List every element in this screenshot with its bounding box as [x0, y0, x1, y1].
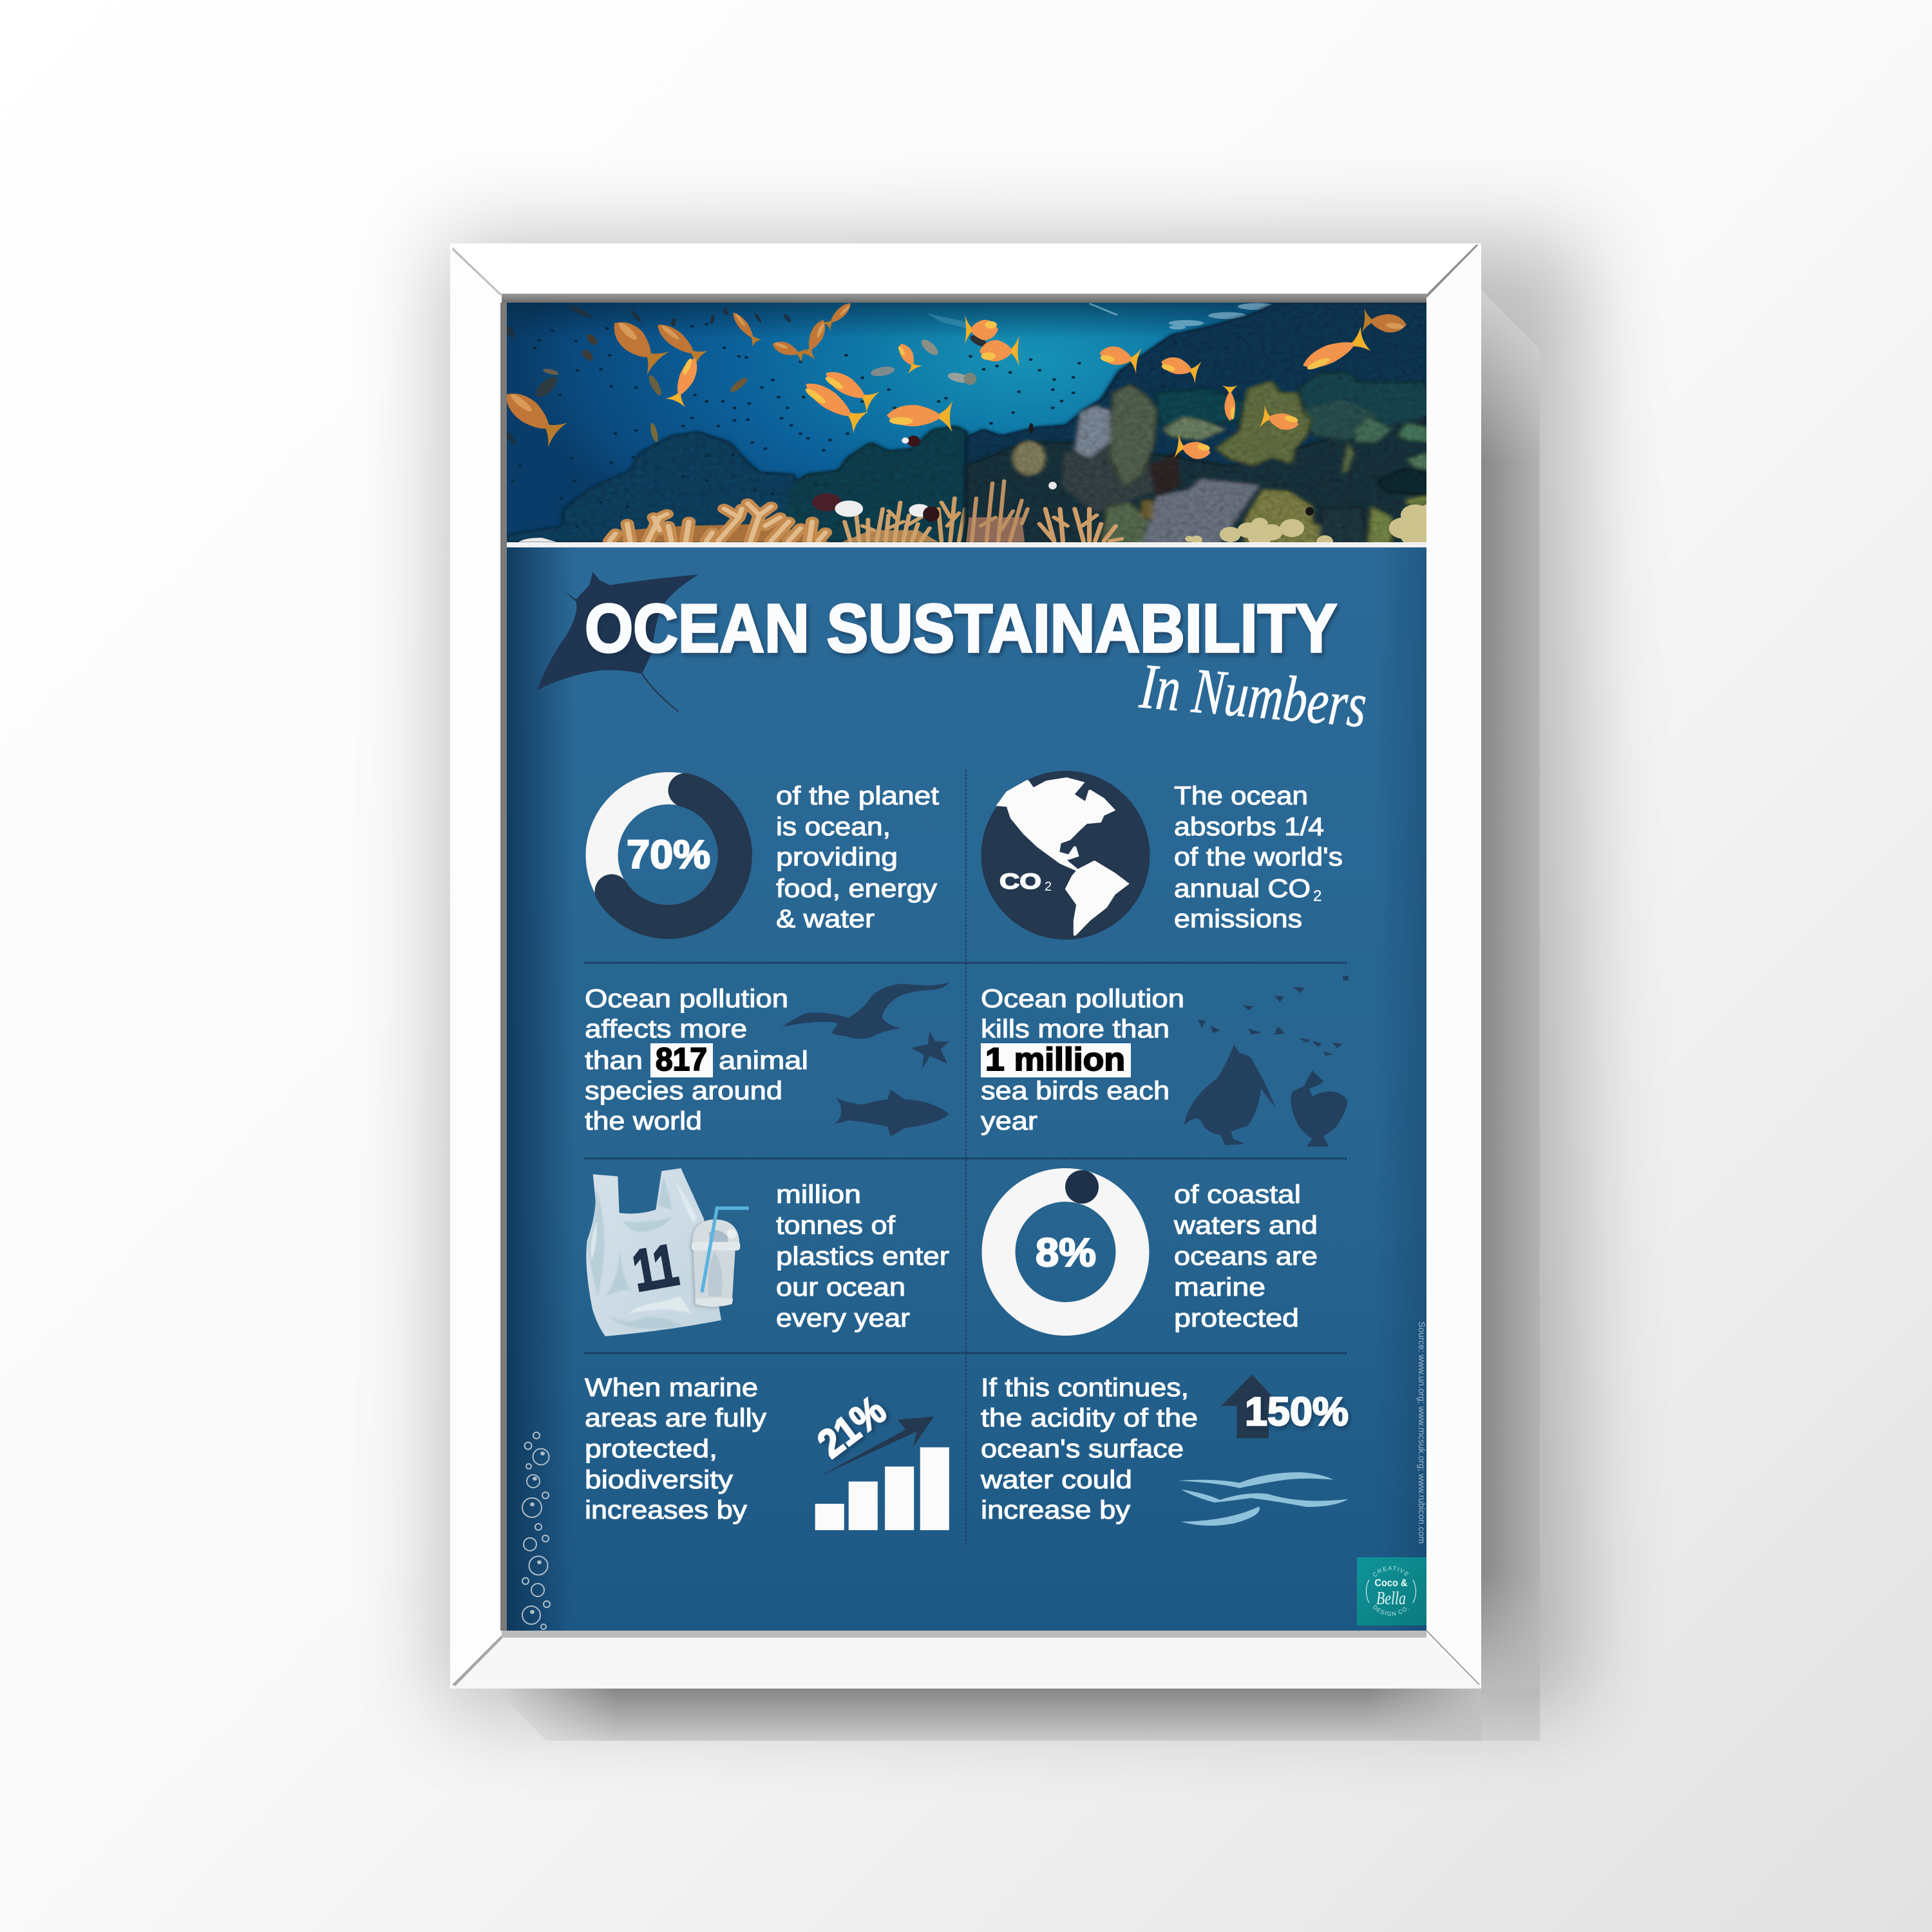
surface light ripples [927, 314, 967, 328]
reef midground [966, 372, 1436, 545]
icon: globe with CO2 [981, 771, 1150, 940]
text: of coastal waters: waters and [1173, 1211, 1318, 1240]
text: ocean pollution affects: affects more [585, 1015, 747, 1043]
text: of the planet: & water [776, 905, 875, 933]
text: ocean pollution kills: Ocean pollution [981, 985, 1184, 1013]
panel: 817 animal species [585, 982, 949, 1137]
bubbles decoration [522, 1432, 550, 1629]
icon: waves [1178, 1472, 1349, 1526]
text: ocean pollution kills [981, 985, 1184, 1135]
right half scenery [963, 303, 1443, 548]
frame soft shadow halo [446, 242, 1579, 1710]
icon: manta ray [537, 572, 699, 712]
text: ocean pollution affects [585, 985, 808, 1135]
icon: plastic bag and cup: 11 [629, 1233, 683, 1304]
chart: 8% donut: 8% [1036, 1231, 1096, 1275]
fire coral large [607, 498, 965, 542]
text: if this continues: ocean's surface [981, 1435, 1184, 1463]
text: ocean absorbs: of the world's [1174, 843, 1343, 871]
text: ocean absorbs: emissions [1174, 905, 1302, 933]
text: of the planet: is ocean, [776, 813, 891, 841]
text: ocean pollution kills: sea birds each [981, 1077, 1170, 1105]
subtitle: In Numbers: In Numbers [1137, 650, 1369, 741]
plankton specks right [971, 356, 1079, 423]
text: if this continues: increase by [981, 1496, 1130, 1524]
chart: 8% donut [998, 1170, 1132, 1319]
dark small fish [503, 304, 972, 445]
grid divider lines [585, 770, 1347, 1546]
text: ocean absorbs: annual CO [1174, 875, 1311, 903]
left half scenery [503, 304, 972, 542]
text: ocean absorbs [1174, 782, 1343, 933]
text: if this continues [980, 1374, 1198, 1524]
chart: 70% donut: 70% [627, 833, 710, 877]
left reef mounds [507, 426, 967, 542]
text: ocean pollution affects: animal [719, 1046, 808, 1075]
text: if this continues: If this continues, [981, 1374, 1189, 1402]
text: million tonnes: our ocean [776, 1273, 905, 1302]
icon: pelicans and flock [1184, 976, 1349, 1146]
text: ocean absorbs: absorbs 1/4 [1174, 813, 1324, 841]
text: ocean pollution affects: species around [585, 1077, 782, 1105]
text: of coastal waters: marine [1174, 1273, 1265, 1302]
chart: rising bars with arrow and 21%: 21% [810, 1388, 894, 1466]
title: OCEAN SUSTAINABILITY [585, 591, 1337, 667]
maroon and white fish [812, 435, 940, 522]
logo: Coco &amp; Bella: CREATIVE [1373, 1566, 1409, 1577]
icon: marine animals [782, 982, 949, 1137]
text: ocean pollution affects: than [585, 1046, 643, 1075]
chart: rising bars with arrow and 21% [810, 1388, 949, 1530]
panel: acidity 150% [980, 1374, 1349, 1526]
panel: ocean absorbs CO2 [981, 771, 1343, 940]
text: ocean absorbs: 2 [1313, 887, 1321, 905]
text: when marine areas [585, 1374, 766, 1524]
white picture frame [450, 243, 1481, 1689]
text: when marine areas: areas are fully [585, 1404, 766, 1432]
logo: Coco &amp; Bella: Coco & [1374, 1578, 1408, 1589]
text: ocean absorbs: The ocean [1174, 782, 1308, 810]
logo: Coco &amp; Bella: DESIGN CO. [1373, 1605, 1409, 1616]
inner frame bevel [500, 294, 1426, 1638]
source note: Source: www.un.org; www.mcsuk.org; www.rubicon.com [1417, 1321, 1427, 1544]
small dark and white fish [963, 334, 1314, 516]
text: million tonnes: plastics enter [776, 1242, 949, 1271]
photo: underwater coral reef with fish [497, 299, 1443, 548]
text: of coastal waters: of coastal [1174, 1180, 1301, 1209]
plankton specks left [513, 324, 946, 527]
chart: 70% donut [601, 788, 735, 922]
panel: 70% planet is ocean [601, 782, 939, 933]
text: million tonnes: every year [776, 1304, 910, 1332]
text: ocean pollution affects: Ocean pollution [585, 985, 788, 1013]
text: of the planet: of the planet [776, 782, 939, 810]
poster blue panel [507, 547, 1426, 1631]
panel: biodiversity 21% [585, 1374, 949, 1530]
text: million tonnes: tonnes of [776, 1211, 896, 1240]
text: of the planet [776, 782, 939, 933]
text: million tonnes: million [776, 1180, 861, 1209]
surface sparkle [1090, 303, 1276, 330]
anthias fish [497, 299, 1408, 465]
text: ocean pollution kills: year [981, 1107, 1037, 1135]
branching corals [966, 481, 1122, 542]
cream coral [1185, 504, 1443, 548]
icon: up arrow with 150%: 150% [1245, 1390, 1349, 1434]
white strip under photo [507, 542, 1426, 547]
frame cast shadow [496, 290, 1540, 1741]
text: when marine areas: biodiversity [585, 1466, 733, 1494]
icon: plastic bag and cup [586, 1168, 749, 1336]
text: of coastal waters: protected [1174, 1304, 1299, 1332]
text: ocean pollution kills: kills more than [981, 1015, 1170, 1043]
text: if this continues: water could [980, 1466, 1132, 1494]
coral heads [1013, 381, 1436, 545]
icon: globe with CO2: CO [999, 869, 1041, 894]
logo: Coco &amp; Bella [1357, 1557, 1426, 1625]
icon: up arrow with 150% [1221, 1374, 1349, 1438]
icon: globe with CO2: 2 [1045, 880, 1052, 894]
text: million tonnes [776, 1180, 949, 1332]
text: of coastal waters: oceans are [1174, 1242, 1318, 1271]
panel: 1 million sea birds [981, 976, 1349, 1146]
logo: Coco &amp; Bella: Bella [1376, 1589, 1406, 1609]
text: of the planet: food, energy [776, 875, 937, 903]
panel: 8% marine protected [998, 1170, 1318, 1332]
text: of the planet: providing [776, 843, 898, 871]
text: when marine areas: protected, [585, 1435, 717, 1463]
panel: 11 million tonnes plastics [586, 1168, 949, 1336]
right reef dark back wall [966, 303, 1436, 545]
text: ocean pollution kills: 1 million [985, 1041, 1125, 1077]
text: when marine areas: When marine [585, 1374, 758, 1402]
text: ocean pollution affects: 817 [656, 1041, 707, 1077]
rock [518, 538, 557, 542]
text: of coastal waters [1173, 1180, 1318, 1332]
text: if this continues: the acidity of the [981, 1404, 1198, 1432]
text: ocean pollution affects: the world [585, 1107, 702, 1135]
text: when marine areas: increases by [585, 1496, 747, 1524]
